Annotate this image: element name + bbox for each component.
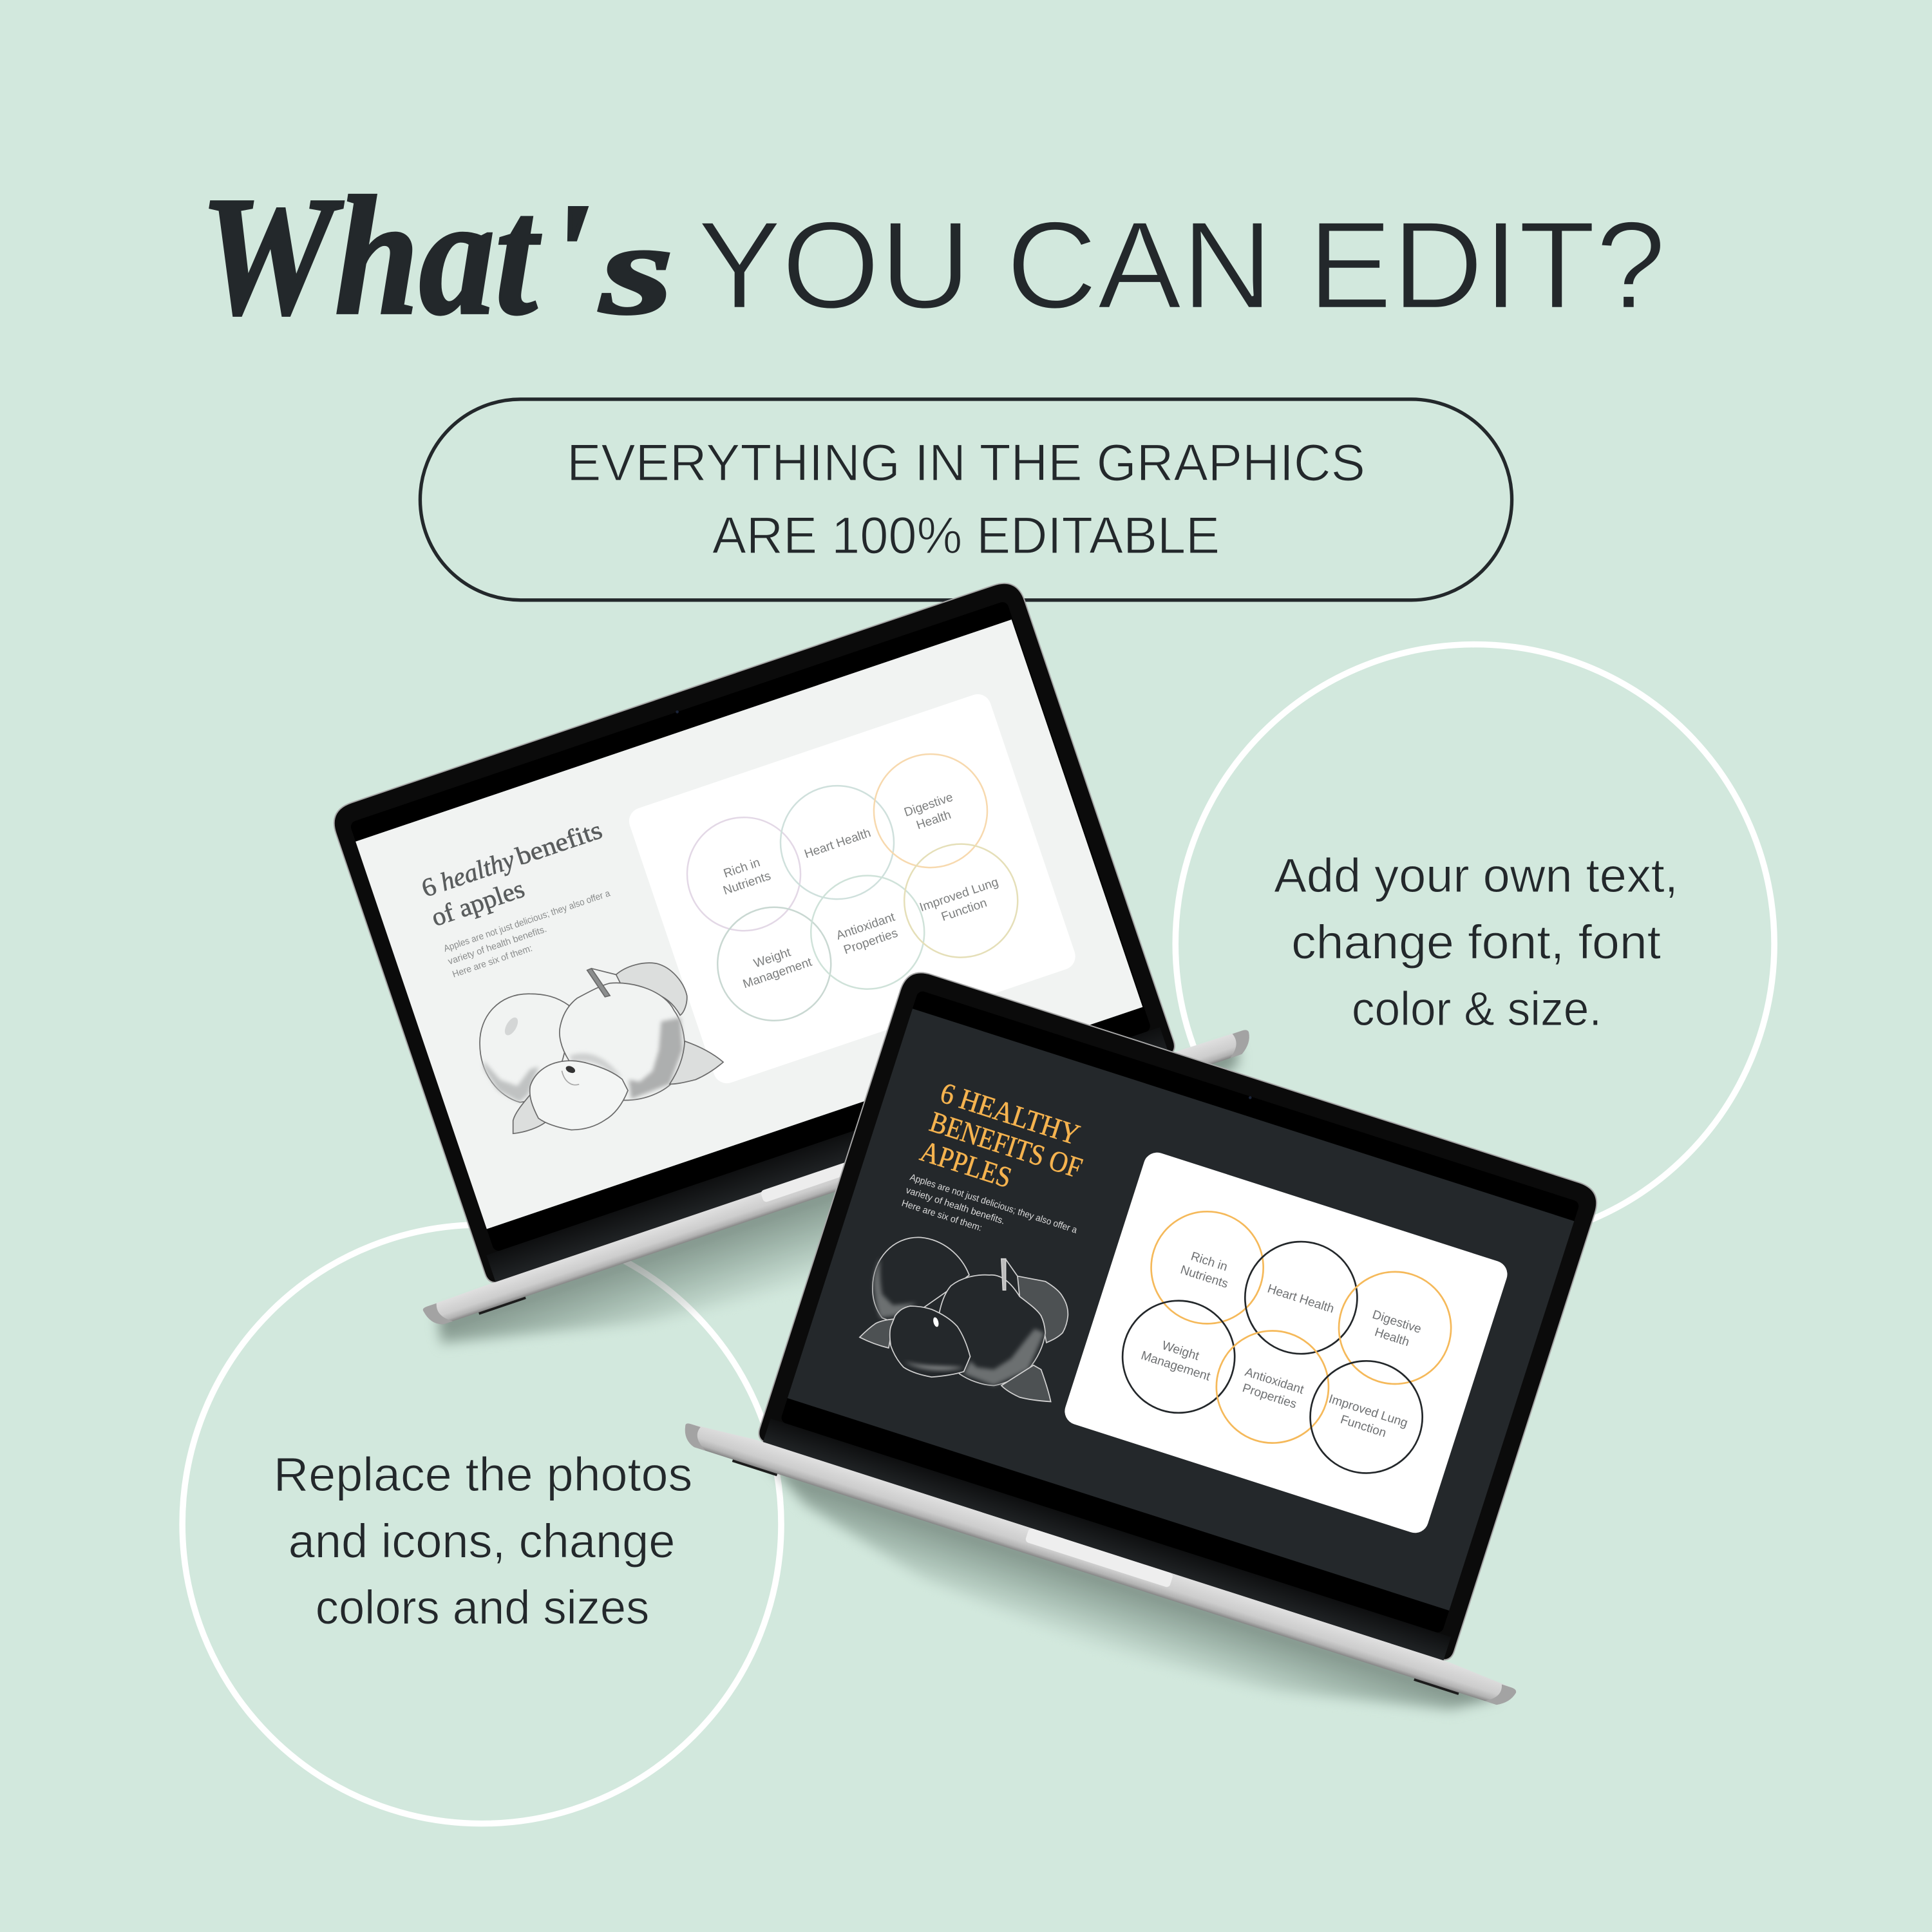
dark slide circle labels: Improved Lung — [1327, 1392, 1409, 1430]
pill callout: ARE 100% EDITABLE — [712, 507, 1220, 565]
dark slide circle labels: Rich in — [1189, 1250, 1229, 1274]
dark slide circle labels — [1139, 1244, 1438, 1446]
title: YOU CAN EDIT?: YOU CAN EDIT? — [697, 195, 1666, 334]
dark slide text and circles — [866, 1075, 1480, 1488]
light slide circle labels: Health — [914, 808, 953, 833]
light slide circle labels: Digestive — [902, 791, 955, 820]
dark slide heading: 6 HEALTHY — [936, 1076, 1084, 1151]
pill callout — [420, 399, 1512, 600]
light slide text and circles — [418, 695, 1033, 1117]
dark slide circle labels: Management — [1139, 1349, 1212, 1384]
light slide heading: 6 — [418, 871, 440, 903]
light slide heading: healthy — [437, 844, 518, 896]
light slide circle labels: Nutrients — [721, 869, 773, 898]
dark slide heading: BENEFITS OF — [926, 1105, 1086, 1184]
dark slide circle labels: Digestive — [1370, 1308, 1423, 1336]
circle: edit text: color & size. — [1352, 981, 1602, 1036]
dark slide paragraph: Here are six of them: — [900, 1198, 983, 1234]
dark slide circle labels: Function — [1339, 1413, 1388, 1440]
dark slide heading: APPLES — [916, 1134, 1016, 1194]
light slide circle labels — [706, 786, 1005, 991]
shadow: back laptop — [432, 1045, 1267, 1404]
light slide paragraph: Apples are not just delicious; they also offer a — [442, 888, 612, 954]
dark slide circle labels: Properties — [1240, 1381, 1298, 1412]
light slide heading: of apples — [428, 874, 528, 932]
light slide circle labels: Management — [741, 955, 814, 991]
dark slide circle labels: Weight — [1160, 1339, 1201, 1363]
light laptop body — [261, 554, 1255, 1331]
dark slide paragraph: variety of health benefits. — [904, 1185, 1006, 1227]
dark slide circle labels: Antioxidant — [1243, 1365, 1306, 1397]
circle: replace photos: and icons, change — [289, 1513, 675, 1567]
dark slide paragraph: Apples are not just delicious; they also offer a — [909, 1172, 1079, 1236]
circle: replace photos: Replace the photos — [274, 1447, 692, 1501]
dark slide circles — [1108, 1197, 1466, 1488]
light slide circles — [672, 739, 1033, 1036]
circle: edit text: change font, font — [1291, 915, 1661, 969]
circle: replace photos — [182, 1225, 781, 1824]
title — [200, 162, 1666, 350]
dark slide circle labels: Health — [1373, 1325, 1411, 1349]
circle: edit text — [1175, 645, 1774, 1243]
light slide paragraph: variety of health benefits. — [447, 924, 548, 967]
light slide heading — [418, 815, 616, 932]
light slide apple sketch — [480, 963, 723, 1133]
light slide circle labels: Weight — [752, 945, 793, 971]
dark slide circle labels: Heart Health — [1265, 1282, 1336, 1316]
light slide circle labels: Antioxidant — [835, 911, 897, 943]
light slide circle labels: Heart Health — [802, 826, 873, 861]
script word: What's: s — [598, 196, 674, 341]
pill callout: EVERYTHING IN THE GRAPHICS — [567, 434, 1365, 492]
circle: edit text: Add your own text, — [1274, 848, 1678, 902]
light slide circle labels: Function — [940, 896, 989, 924]
script word: What's: What — [200, 162, 542, 350]
dark slide apple sketch — [860, 1237, 1068, 1402]
light slide heading: benefits — [513, 815, 605, 871]
light slide circle labels: Properties — [842, 926, 900, 957]
light slide circle labels: Rich in — [722, 856, 762, 881]
shadow: front laptop — [743, 1461, 1501, 1772]
dark slide circle labels: Nutrients — [1179, 1263, 1230, 1291]
circle: replace photos: colors and sizes — [316, 1580, 649, 1634]
laptop: dark slide — [679, 945, 1671, 1712]
dark laptop body — [679, 945, 1671, 1712]
light slide circle labels: Improved Lung — [918, 875, 1000, 914]
script word: What's: ' — [552, 178, 588, 321]
light slide paragraph: Here are six of them: — [451, 943, 534, 980]
laptop: light slide — [261, 554, 1255, 1331]
